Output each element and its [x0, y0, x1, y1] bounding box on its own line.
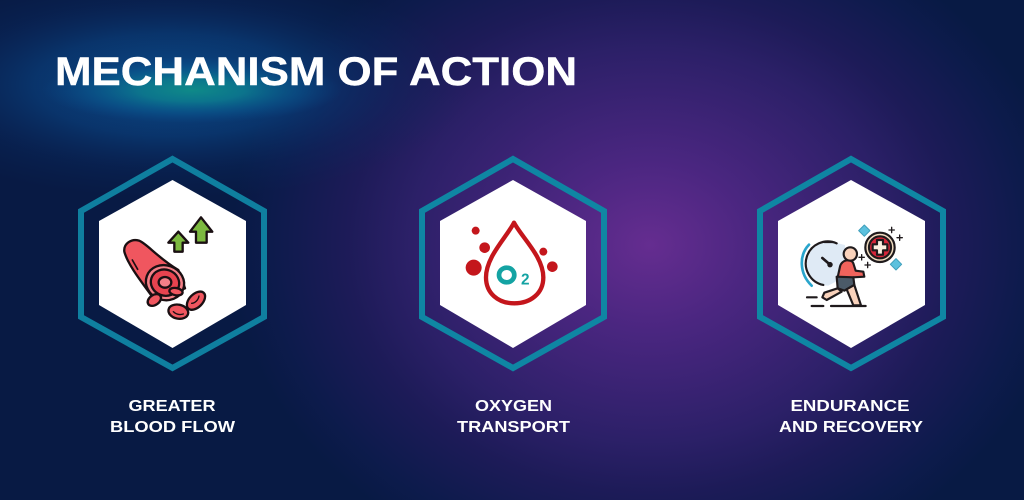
icon: oxygen drop: 2	[521, 272, 530, 289]
label	[110, 398, 236, 436]
hexagon frame	[81, 159, 264, 368]
label: GREATER	[128, 398, 216, 415]
hexagon frame	[760, 159, 943, 368]
icon: runner with stopwatch and medical badge	[802, 225, 902, 306]
label	[779, 398, 923, 436]
hexagon frame	[422, 159, 604, 368]
label: ENDURANCE	[790, 398, 910, 415]
label: TRANSPORT	[457, 419, 570, 436]
label: AND RECOVERY	[779, 419, 923, 436]
label: BLOOD FLOW	[110, 419, 236, 436]
icon: oxygen drop	[466, 223, 558, 303]
title: MECHANISM OF ACTION	[55, 50, 577, 94]
hexagon white background	[99, 180, 246, 348]
panel: oxygen transport	[422, 159, 604, 436]
panel: endurance and recovery	[760, 159, 943, 436]
icon: blood vessel with cells and arrows	[124, 217, 212, 321]
hexagon white background	[778, 180, 925, 348]
panel: greater blood flow	[81, 159, 264, 436]
label	[457, 398, 570, 436]
label: OXYGEN	[475, 398, 552, 415]
hexagon white background	[440, 180, 586, 348]
